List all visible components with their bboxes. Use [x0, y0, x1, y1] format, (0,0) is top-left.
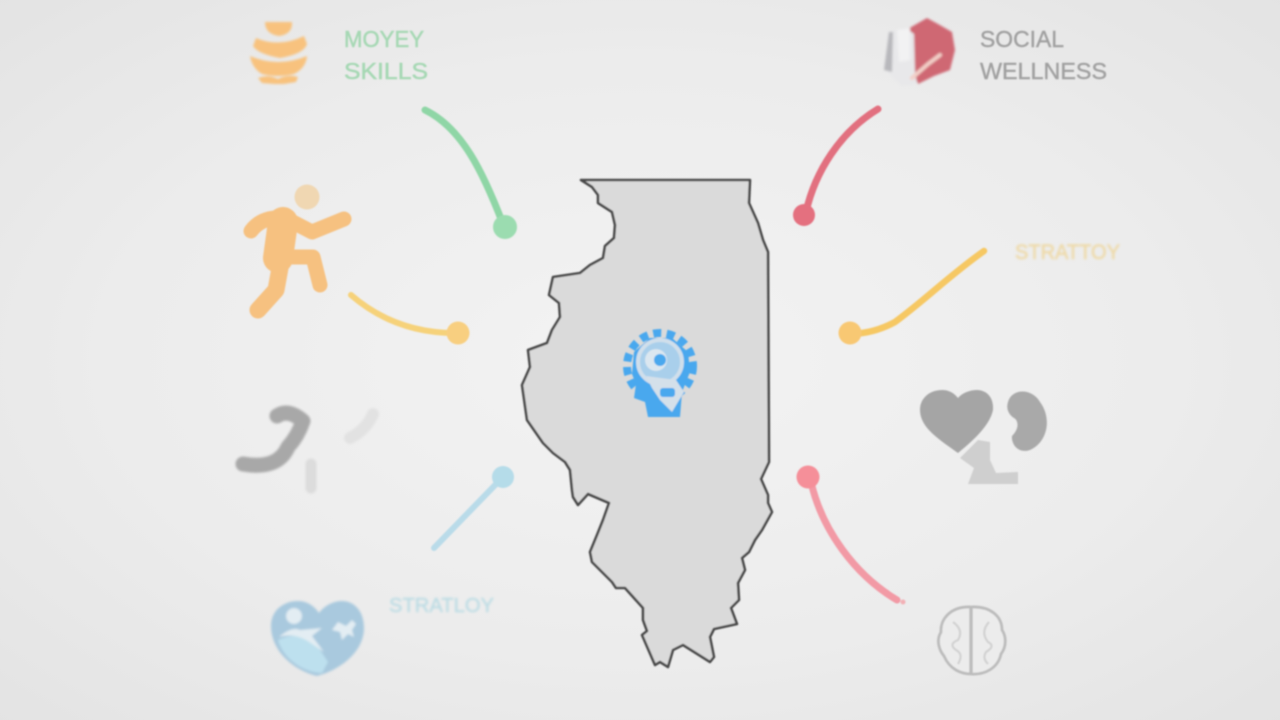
icon: blue heart with figure	[271, 601, 364, 676]
icon: blue head with gear	[627, 333, 693, 417]
icon: orange layered motor skills	[250, 22, 307, 84]
map: Illinois outline	[522, 180, 772, 667]
text: motor skills label: MOYEY	[344, 26, 424, 52]
icon: brain outline	[938, 607, 1005, 674]
arrow: pink connector	[796, 466, 906, 604]
arrow: green connector	[425, 110, 517, 239]
text: social wellness label: WELLNESS	[980, 58, 1107, 84]
icon: running figure	[251, 184, 344, 310]
arrow: light blue connector	[434, 466, 514, 548]
icon: gray heart and organs	[920, 390, 1047, 484]
icon: social wellness red and gray	[884, 18, 955, 86]
text: social wellness label	[980, 26, 1107, 84]
icon: gray limb figure	[243, 413, 373, 488]
text: motor skills label	[344, 26, 428, 84]
arrow: yellow connector	[351, 295, 470, 344]
arrow: amber connector	[838, 251, 984, 344]
text: motor skills label: SKILLS	[344, 58, 428, 84]
text: strategy label right: STRATTOY	[1015, 241, 1120, 264]
arrow: red connector	[793, 109, 878, 226]
text: social wellness label: SOCIAL	[980, 26, 1064, 52]
text: strategy label left: STRATLOY	[389, 595, 494, 617]
